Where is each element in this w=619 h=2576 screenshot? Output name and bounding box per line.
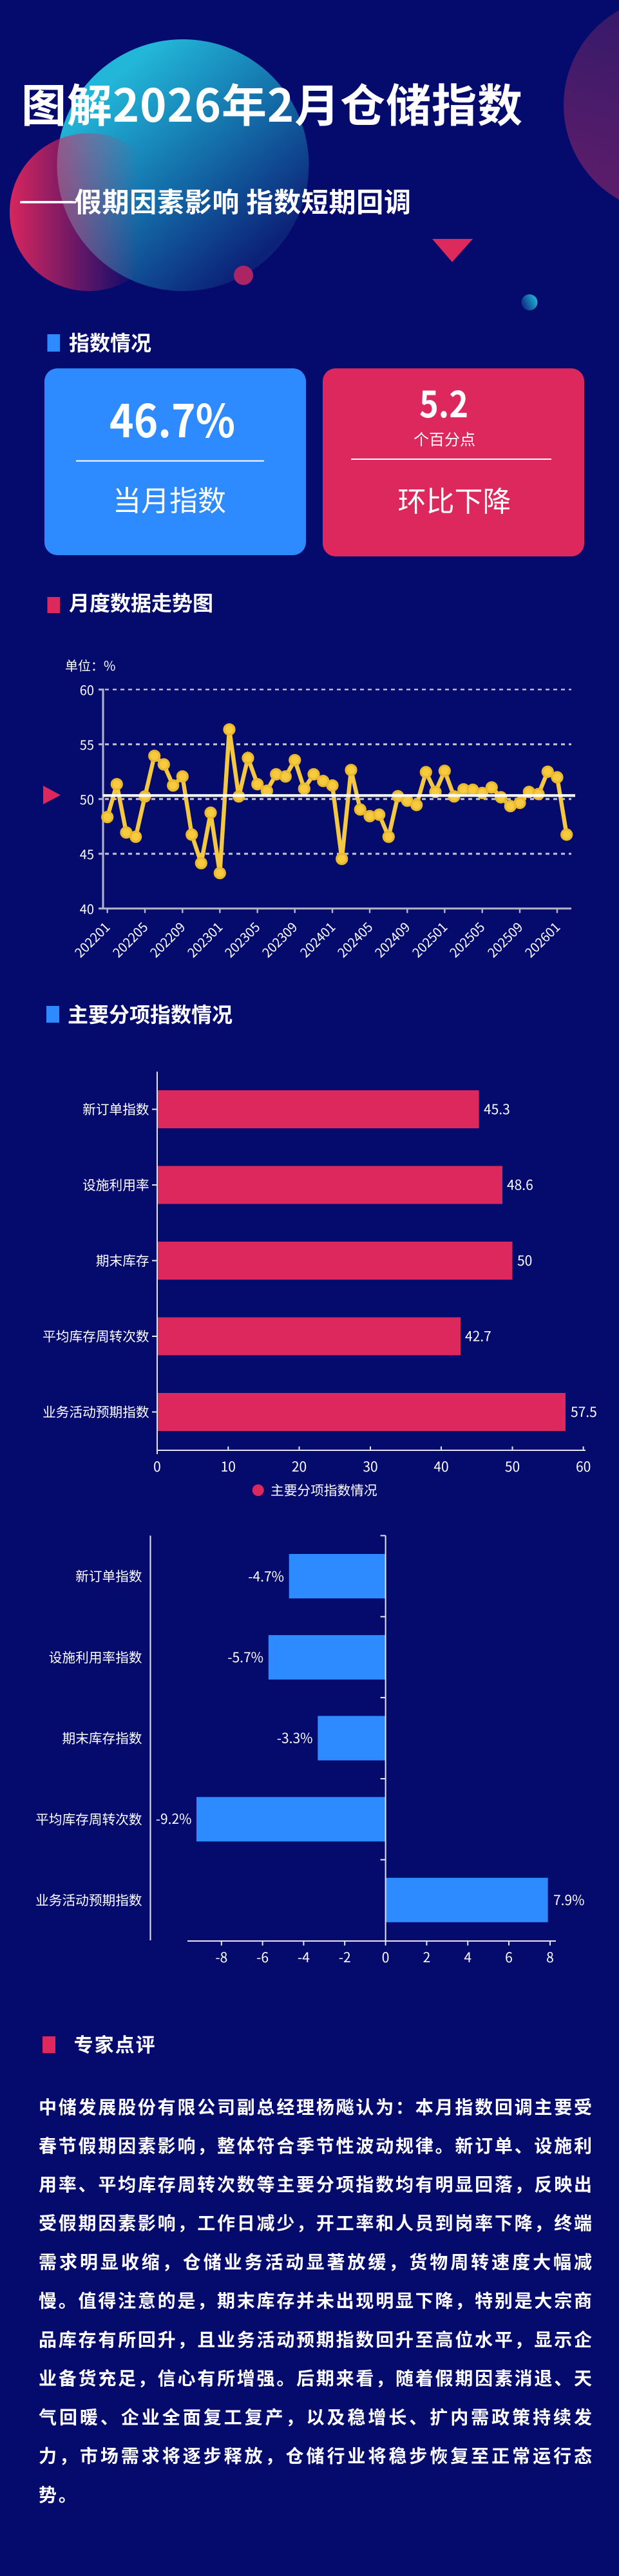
x axis labels: -4	[298, 1947, 310, 1967]
x axis labels: -6	[256, 1947, 269, 1967]
x axis labels: 202309	[258, 918, 301, 961]
x axis labels: 8	[546, 1947, 554, 1967]
category labels: 设施利用率	[82, 1175, 149, 1194]
y axis labels: 55	[80, 735, 94, 753]
decorative dot: red	[234, 265, 253, 285]
x axis labels: 202505	[445, 918, 488, 961]
value labels: 48.6	[507, 1175, 533, 1194]
category labels	[35, 1566, 142, 1909]
decorative triangle	[432, 239, 473, 262]
bars	[157, 1090, 566, 1431]
expert comment body: 春节假期因素影响，整体符合季节性波动规律。新订单、设施利	[39, 2132, 592, 2158]
x axis labels	[70, 918, 564, 961]
data line	[108, 730, 567, 873]
category labels: 业务活动预期指数	[43, 1401, 149, 1421]
legend: 主要分项指数情况	[271, 1480, 377, 1499]
x axis labels: 202205	[108, 918, 151, 961]
x axis labels: 50	[505, 1457, 520, 1476]
y axis labels: 45	[80, 844, 94, 863]
value labels: 45.3	[484, 1099, 510, 1119]
expert comment body: 需求明显收缩，仓储业务活动显著放缓，货物周转速度大幅减	[39, 2249, 592, 2275]
x axis labels: 30	[363, 1457, 378, 1476]
axes	[99, 690, 571, 913]
x axis labels: 202601	[520, 918, 564, 961]
x axis labels: 202409	[370, 918, 414, 961]
x axis labels: 40	[433, 1457, 449, 1476]
x axis labels: 202501	[408, 918, 451, 961]
category labels: 新订单指数	[75, 1566, 142, 1585]
decorative circle: large teal	[57, 39, 309, 291]
category labels: 新订单指数	[82, 1099, 149, 1118]
expert comment body: 力，市场需求将逐步释放，仓储行业将稳步恢复至正常运行态	[39, 2442, 592, 2468]
value labels: -3.3%	[277, 1728, 313, 1748]
section heading: monthly trend: 月度数据走势图	[69, 587, 213, 617]
value labels: 7.9%	[553, 1890, 585, 1909]
expert comment body: 用率、平均库存周转次数等主要分项指数均有明显回落，反映出	[39, 2171, 592, 2197]
marker triangle at 50 line	[43, 786, 61, 804]
value labels: -4.7%	[248, 1566, 284, 1586]
section heading: expert comment: 专家点评	[74, 2029, 155, 2058]
category labels: 期末库存指数	[62, 1727, 142, 1747]
value labels: 57.5	[571, 1402, 597, 1421]
value: 46.7%: 46.7%	[110, 386, 235, 451]
card: month-on-month decline	[323, 368, 584, 556]
x axis labels: 202401	[296, 918, 339, 961]
y axis labels	[80, 680, 94, 918]
decorative circle: red	[10, 133, 167, 291]
section heading: index overview: 指数情况	[69, 327, 151, 357]
y axis labels: 40	[80, 899, 94, 918]
x axis labels: 202509	[483, 918, 526, 961]
bars	[196, 1554, 548, 1922]
value labels: 50	[517, 1251, 532, 1270]
value labels	[156, 1566, 585, 1909]
x axis labels: 60	[576, 1457, 591, 1476]
expert comment body	[39, 2094, 592, 2507]
reference line	[103, 794, 575, 797]
x axis labels	[153, 1457, 591, 1476]
x axis labels: 202405	[333, 918, 376, 961]
x axis labels: 4	[464, 1947, 471, 1967]
expert comment body: 中储发展股份有限公司副总经理杨飚认为：本月指数回调主要受	[39, 2094, 592, 2119]
data points	[102, 724, 572, 878]
x axis labels: 202301	[183, 918, 226, 961]
x axis labels: 202305	[220, 918, 263, 961]
expert comment body: 慢。值得注意的是，期末库存并未出现明显下降，特别是大宗商	[39, 2287, 592, 2313]
decorative circle: purple right	[564, 0, 619, 214]
gridlines	[105, 690, 571, 854]
decorative dot: teal	[522, 294, 537, 310]
x axis labels: -8	[215, 1947, 227, 1967]
subtitle: ——假期因素影响 指数短期回调	[20, 181, 411, 220]
unit: percentage points: 个百分点	[414, 427, 475, 450]
expert comment body: 业备货充足，信心有所增强。后期来看，随着假期因素消退、天	[39, 2365, 592, 2391]
label: month-on-month decline: 环比下降	[398, 478, 511, 520]
expert comment body: 气回暖、企业全面复工复产，以及稳增长、扩内需政策持续发	[39, 2403, 592, 2429]
category labels	[43, 1099, 149, 1421]
x axis labels: 6	[505, 1947, 513, 1967]
y axis labels: 60	[80, 680, 94, 699]
value labels: -5.7%	[227, 1647, 263, 1667]
category labels: 平均库存周转次数	[35, 1808, 142, 1828]
axes	[152, 1072, 586, 1454]
axes	[187, 1535, 556, 1946]
x axis labels	[215, 1947, 554, 1967]
line chart: monthly index	[70, 680, 575, 961]
x axis labels: 2	[423, 1947, 430, 1967]
bar chart: month-on-month change	[35, 1535, 585, 1967]
value: 5.2: 5.2	[419, 376, 468, 428]
expert comment body: 品库存有所回升，且业务活动预期指数回升至高位水平，显示企	[39, 2326, 592, 2352]
bar chart: sub-index values	[43, 1072, 597, 1499]
x axis labels: 10	[221, 1457, 236, 1476]
x axis labels: 0	[153, 1457, 161, 1476]
x axis labels: -2	[339, 1947, 351, 1967]
category labels: 设施利用率指数	[49, 1647, 142, 1666]
unit label: 单位：%	[65, 656, 115, 674]
left rule	[149, 1535, 151, 1940]
expert comment body: 受假期因素影响，工作日减少，开工率和人员到岗率下降，终端	[39, 2210, 592, 2235]
category labels: 平均库存周转次数	[43, 1325, 149, 1345]
label: current index: 当月指数	[113, 478, 226, 519]
card: current index	[44, 368, 306, 555]
value labels	[465, 1099, 597, 1421]
x axis labels: 20	[292, 1457, 307, 1476]
value labels: 42.7	[465, 1327, 491, 1346]
x axis labels: 0	[382, 1947, 389, 1967]
category labels: 期末库存	[96, 1250, 149, 1269]
x axis labels: 202201	[70, 918, 113, 961]
x axis labels: 202209	[146, 918, 189, 961]
value labels: -9.2%	[156, 1809, 192, 1828]
title: 图解2026年2月仓储指数	[21, 70, 522, 135]
category labels: 业务活动预期指数	[35, 1889, 142, 1909]
y axis labels: 50	[80, 790, 94, 808]
section heading: main sub-indices: 主要分项指数情况	[68, 999, 233, 1028]
expert comment body: 势。	[39, 2481, 78, 2507]
